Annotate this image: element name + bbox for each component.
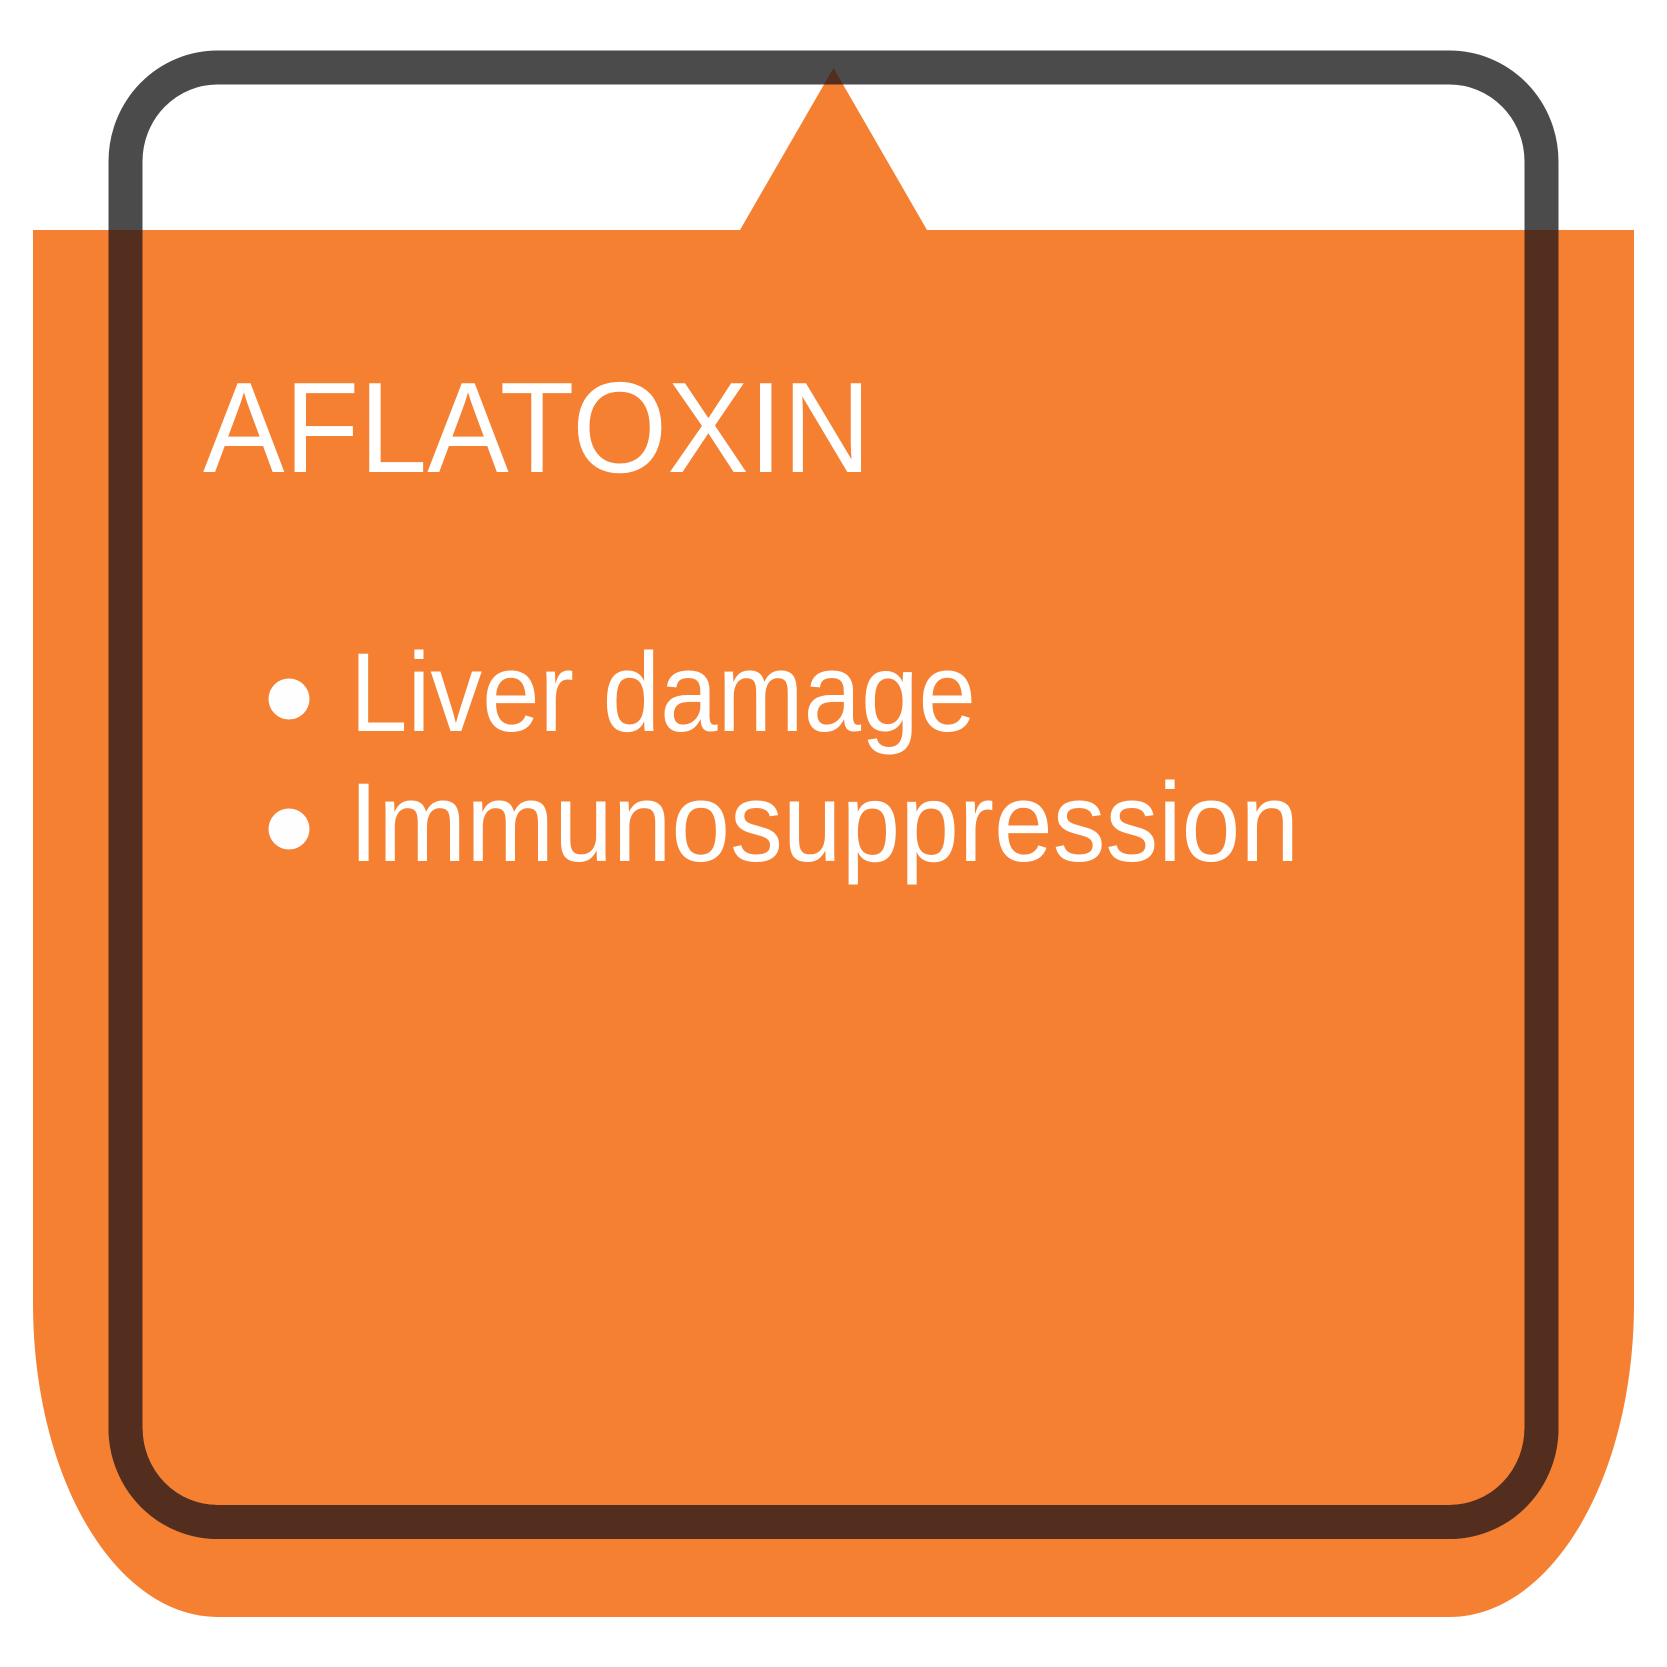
text: Immunosuppression: Immunosuppression	[349, 760, 1299, 885]
bullet: liver damage	[268, 678, 310, 720]
frame: rounded dark outline	[126, 68, 1542, 1522]
bullet: immunosuppression	[268, 808, 310, 850]
text: Liver damage: Liver damage	[350, 630, 976, 755]
list: effects	[268, 630, 1299, 885]
heading: AFLATOXIN: AFLATOXIN	[203, 356, 871, 500]
